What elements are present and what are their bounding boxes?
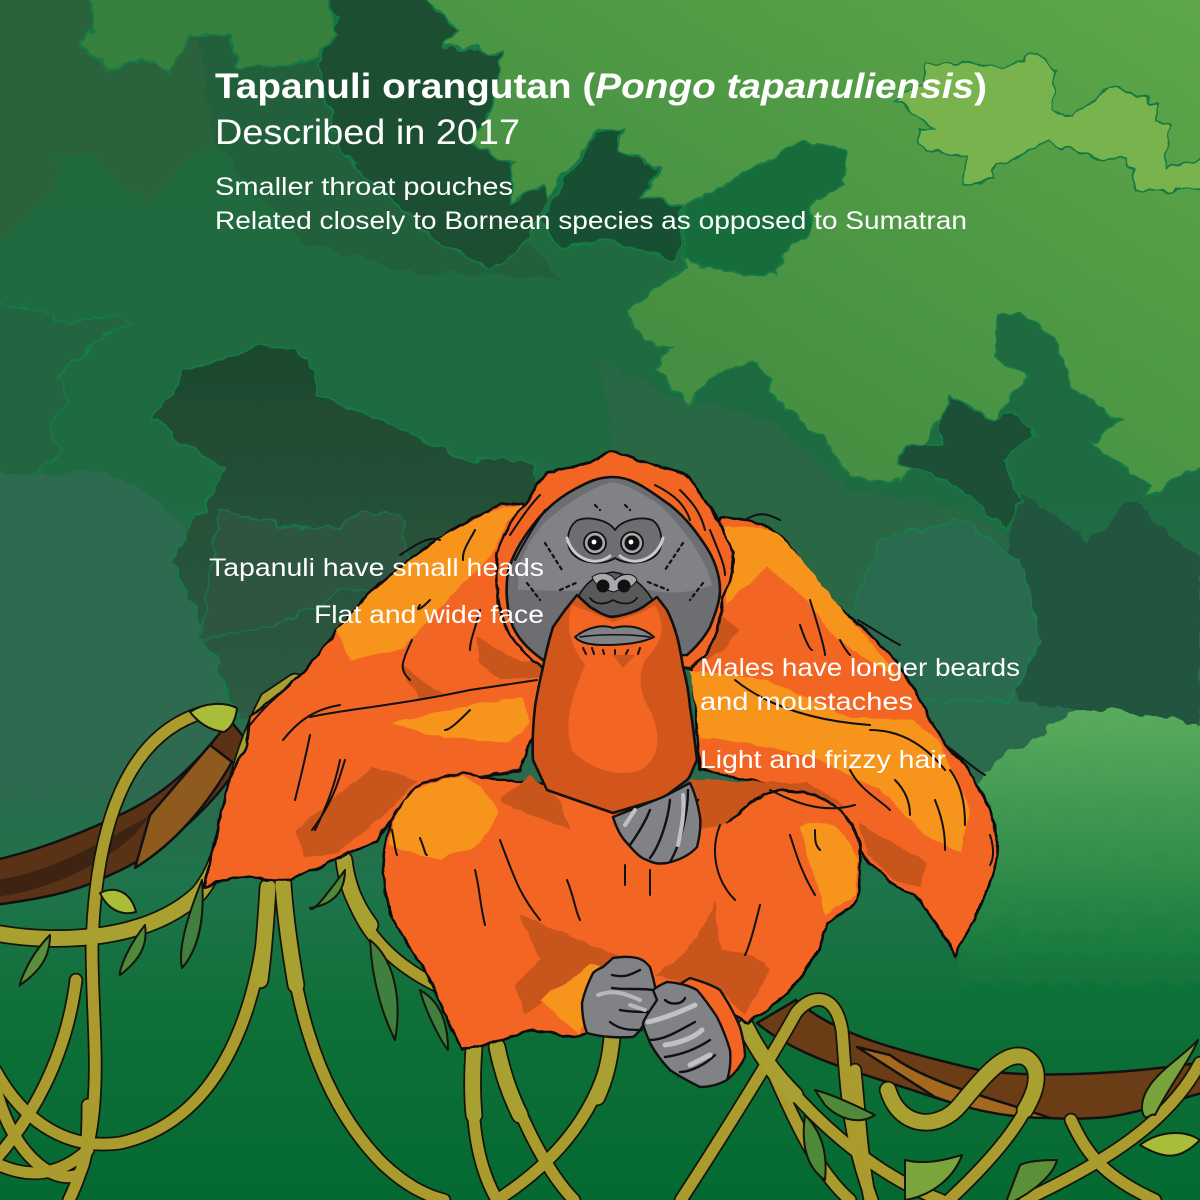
- label: small heads: Tapanuli have small heads: [209, 554, 544, 582]
- branch: left: [0, 720, 250, 905]
- orange hair around the head: [496, 452, 733, 668]
- description: Related closely to Bornean species as opposed to Sumatran: [215, 207, 967, 235]
- label: beards: and moustaches: [700, 688, 913, 716]
- right arm and shoulder: [687, 518, 997, 957]
- beard: [533, 595, 697, 813]
- label: beards: [700, 654, 1020, 716]
- orangutan: [203, 452, 997, 1087]
- fur strokes: [250, 485, 993, 955]
- eye rings: [567, 518, 663, 563]
- branch: right: [757, 1000, 1200, 1119]
- gray face: [507, 477, 720, 660]
- label: beards: Males have longer beards: [700, 654, 1020, 682]
- label: hair: Light and frizzy hair: [700, 746, 946, 774]
- title: Described in 2017: [215, 113, 520, 152]
- leaves: [20, 704, 1200, 1200]
- hanging vines: [0, 682, 1200, 1200]
- label: flat face: Flat and wide face: [314, 601, 544, 629]
- hand at chest: [613, 783, 700, 864]
- description: [215, 173, 967, 235]
- torso and legs: [383, 773, 860, 1050]
- title: Tapanuli orangutan ( Pongo tapanuliensis ): [215, 67, 987, 106]
- left arm and shoulder: [203, 503, 545, 887]
- fur body: [203, 503, 997, 1050]
- title: [215, 67, 987, 152]
- lower right hand: [643, 978, 745, 1087]
- nose and muzzle: [575, 572, 655, 616]
- eyes: [588, 536, 640, 550]
- mouth: [575, 626, 654, 654]
- lower left hand: [582, 957, 657, 1037]
- description: Smaller throat pouches: [215, 173, 513, 201]
- wrinkle marks: [527, 505, 703, 617]
